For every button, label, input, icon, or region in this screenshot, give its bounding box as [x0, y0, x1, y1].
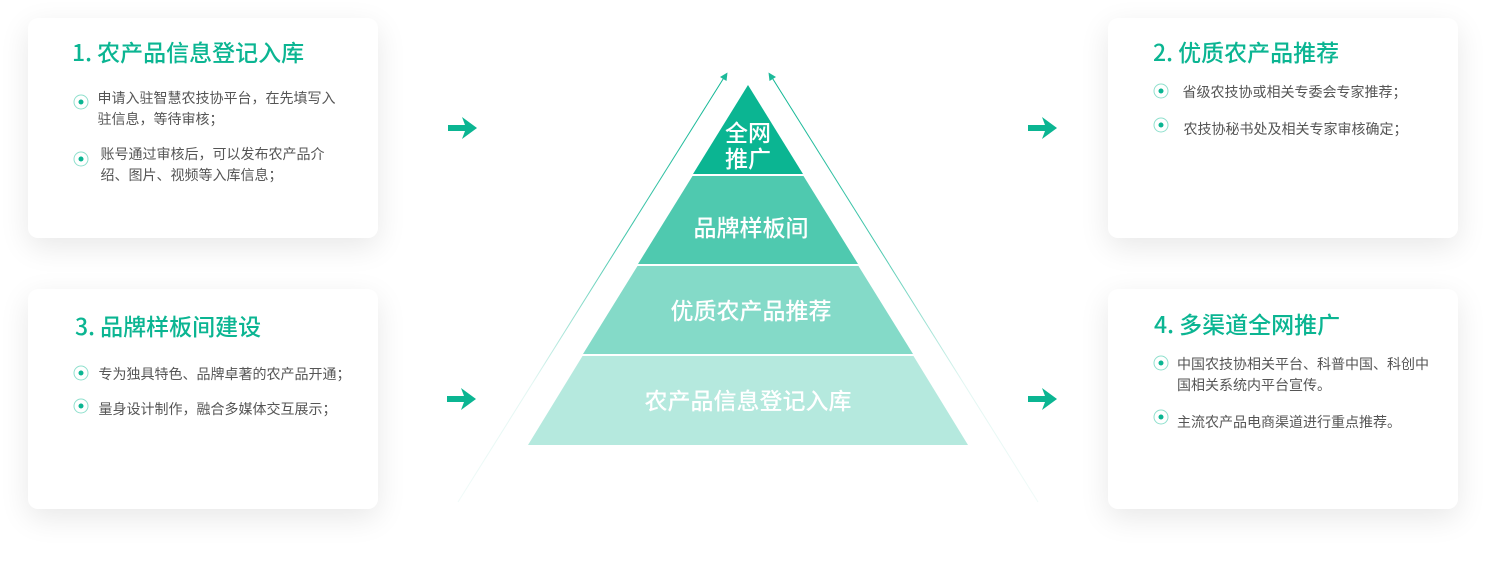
text: step 4 item 2: 主流农产品电商渠道进行重点推荐。 — [1177, 414, 1401, 430]
bullet icon — [1154, 84, 1168, 98]
panel: step 4 — [1108, 289, 1458, 509]
panel: step 1 — [28, 18, 378, 238]
text: step 4 item 1 — [1177, 356, 1429, 393]
left rising arrow — [458, 72, 728, 502]
arrow: step 1 to pyramid — [448, 117, 477, 139]
pyramid tier: 品牌样板间 — [638, 176, 858, 264]
pyramid tier: 农产品信息登记入库: 农产品信息登记入库 — [644, 388, 852, 414]
heading: step 3: 3. 品牌样板间建设 — [75, 308, 261, 342]
text: step 3 item 2: 量身设计制作，融合多媒体交互展示； — [98, 401, 336, 417]
text: step 3 item 1: 专为独具特色、品牌卓著的农产品开通； — [98, 366, 350, 382]
text: step 1 item 2 — [100, 146, 324, 183]
panel: step 2 — [1108, 18, 1458, 238]
panel: step 3 — [28, 289, 378, 509]
bullet icon — [74, 398, 88, 414]
heading: step 4: 4. 多渠道全网推广 — [1154, 306, 1340, 340]
pyramid tier: 农产品信息登记入库 — [528, 356, 968, 445]
text: step 1 item 2: 绍、图片、视频等入库信息； — [100, 167, 282, 183]
arrow: step 3 to pyramid — [447, 388, 476, 410]
pyramid tier: 全网推广 — [693, 85, 803, 174]
pyramid tier: 优质农产品推荐: 优质农产品推荐 — [670, 298, 832, 324]
text: step 2 item 2: 农技协秘书处及相关专家审核确定； — [1184, 121, 1408, 137]
text: step 1 item 1 — [98, 90, 336, 127]
heading: step 2: 2. 优质农产品推荐 — [1153, 34, 1339, 68]
bullet icon — [1154, 410, 1168, 424]
bullet icon — [1154, 118, 1168, 132]
pyramid tier: 优质农产品推荐 — [583, 266, 913, 354]
bullet icon — [74, 366, 88, 380]
pyramid tier: 全网推广: 全网 — [725, 120, 771, 146]
text: step 1 item 1: 驻信息，等待审核； — [98, 111, 224, 127]
text: step 2 item 1: 省级农技协或相关专委会专家推荐； — [1182, 84, 1406, 100]
bullet icon — [74, 94, 88, 110]
text: step 1 item 2: 账号通过审核后，可以发布农产品介 — [100, 146, 324, 162]
arrow: pyramid to step 4 — [1028, 388, 1057, 410]
heading: step 1: 1. 农产品信息登记入库 — [72, 34, 304, 68]
text: step 4 item 1: 中国农技协相关平台、科普中国、科创中 — [1177, 356, 1429, 372]
bullet icon — [1154, 356, 1168, 370]
right rising arrow — [768, 72, 1038, 502]
text: step 1 item 1: 申请入驻智慧农技协平台，在先填写入 — [98, 90, 336, 106]
bullet icon — [74, 152, 88, 166]
pyramid tier: 品牌样板间: 品牌样板间 — [694, 215, 808, 241]
text: step 4 item 1: 国相关系统内平台宣传。 — [1177, 377, 1331, 393]
arrow: pyramid to step 2 — [1028, 117, 1057, 139]
pyramid tier: 全网推广: 推广 — [725, 146, 771, 172]
